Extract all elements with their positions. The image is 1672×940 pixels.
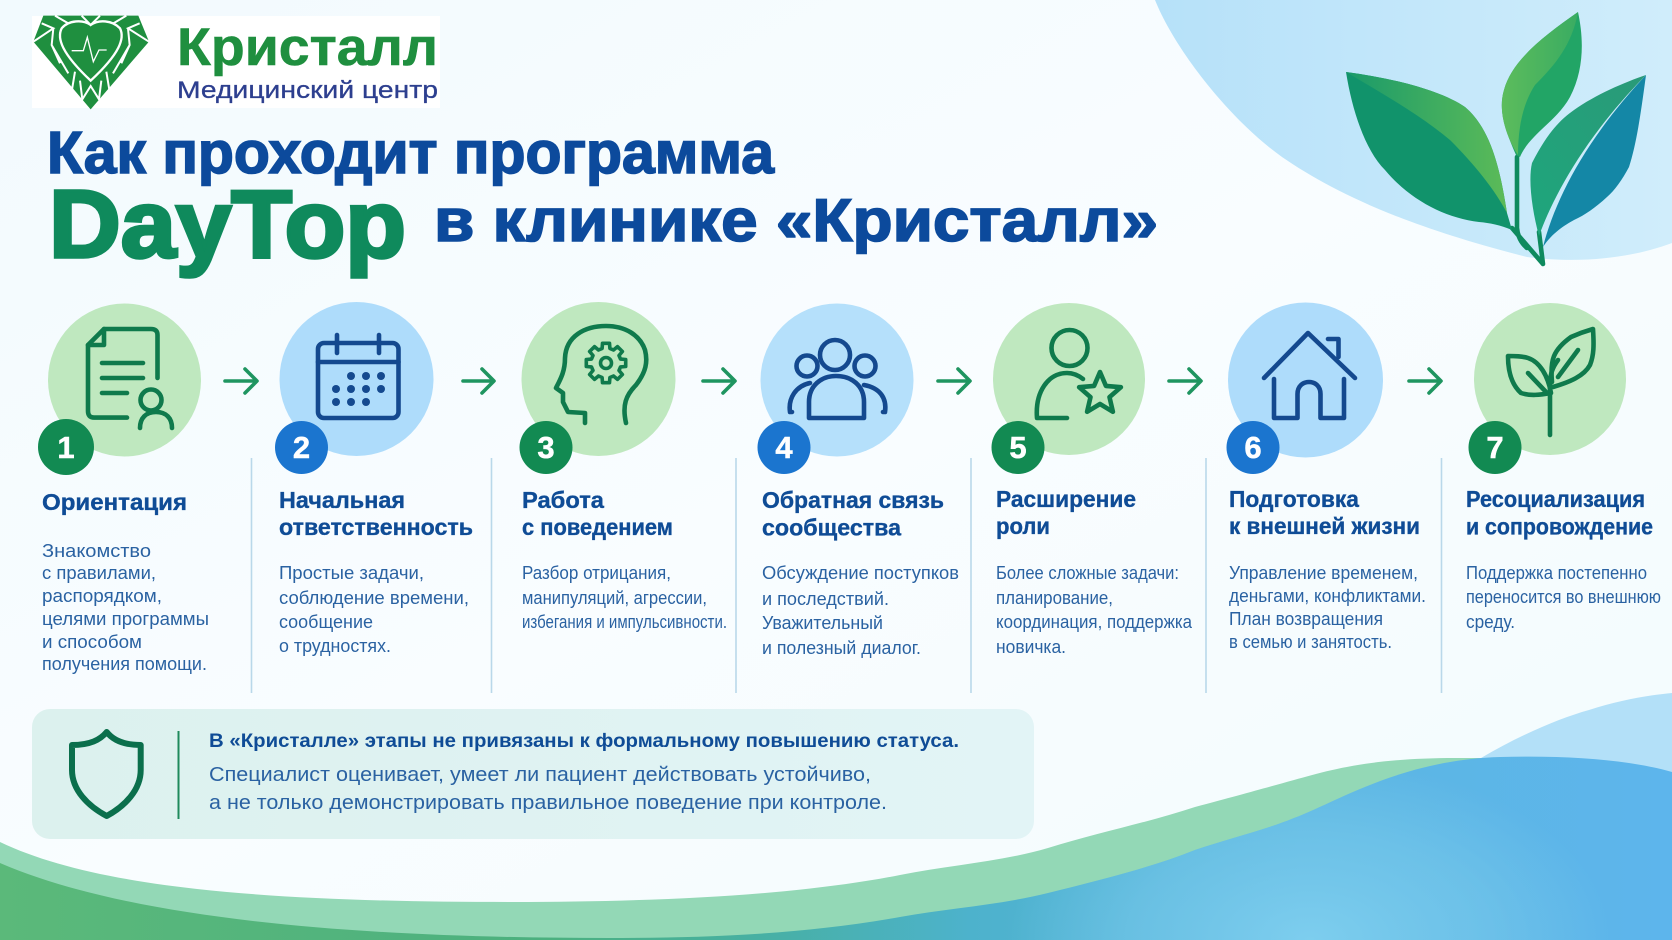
arrow 6 — [1409, 369, 1441, 393]
step 5 text: новичка. — [996, 637, 1066, 657]
badge 1: 1 — [57, 430, 75, 465]
step 2 text: соблюдение времени, — [279, 588, 469, 608]
badge 3: 3 — [537, 430, 555, 465]
callout text: Специалист оценивает, умеет ли пациент действовать устойчиво, — [209, 764, 871, 786]
callout text: В «Кристалле» этапы не привязаны к формальному повышению статуса. — [209, 731, 959, 752]
top leaf — [1502, 12, 1582, 157]
step 5 title — [996, 486, 1136, 539]
step 2 text: сообщение — [279, 612, 373, 632]
step 5 text: Более сложные задачи: — [996, 563, 1179, 583]
badge 3 — [520, 421, 572, 474]
step 4 text: Уважительный — [762, 613, 883, 633]
title line 1: Как проходит программа — [47, 120, 775, 186]
step 7 — [1466, 303, 1661, 632]
step 2 title — [279, 487, 473, 540]
step 6 title: к внешней жизни — [1229, 513, 1420, 539]
arrow 5 — [1169, 369, 1201, 393]
badge 7: 7 — [1486, 430, 1504, 465]
step 7 text: среду. — [1466, 612, 1515, 632]
arrow 1 — [225, 369, 257, 393]
icon: person with star — [1037, 330, 1121, 418]
step 3 title: с поведением — [522, 514, 673, 540]
step 5 text: координация, поддержка — [996, 612, 1193, 632]
title DayTop: DayTop — [49, 171, 406, 278]
step 1 text: с правилами, — [42, 563, 156, 583]
badge 5: 5 — [1009, 430, 1027, 465]
step 4 text — [762, 563, 959, 658]
step 1 text: целями программы — [42, 609, 209, 629]
step 6 text: План возвращения — [1229, 609, 1383, 629]
step 3 text: Разбор отрицания, — [522, 563, 671, 583]
step 3 text: избегания и импульсивности. — [522, 612, 727, 632]
step 6 title: Подготовка — [1229, 486, 1359, 512]
step 4 text: и полезный диалог. — [762, 638, 921, 658]
bottom waves — [0, 693, 1672, 940]
circle 4 — [760, 304, 914, 456]
plant illustration — [1346, 12, 1646, 264]
callout panel — [32, 709, 1034, 839]
circle 1 — [48, 304, 201, 456]
step dividers — [252, 458, 1442, 693]
step 6 text: Управление временем, — [1229, 563, 1418, 583]
step 6 text — [1229, 563, 1426, 652]
step 6 text: деньгами, конфликтами. — [1229, 586, 1426, 606]
circle 6 — [1228, 302, 1383, 458]
step 6 text: в семью и занятость. — [1229, 632, 1392, 652]
step 7 text: Поддержка постепенно — [1466, 563, 1647, 583]
step 2 text — [279, 563, 469, 656]
step 1 — [38, 304, 209, 674]
top-right blue shape — [1155, 0, 1672, 260]
arrow 4 — [938, 369, 970, 393]
icon: head with gear — [556, 326, 646, 423]
badge 2 — [275, 421, 328, 474]
callout text: а не только демонстрировать правильное поведение при контроле. — [209, 792, 887, 814]
step 2 title: ответственность — [279, 514, 473, 540]
logo subtitle: Медицинский центр — [177, 77, 438, 104]
step 7 text — [1466, 563, 1661, 632]
step 1 text — [42, 541, 209, 674]
step 7 title: и сопровождение — [1466, 514, 1653, 540]
circle 2 — [280, 302, 434, 456]
badge 7 — [1468, 421, 1522, 474]
icon: document with person — [88, 329, 172, 428]
left leaf — [1346, 72, 1512, 230]
step 4 text: Обсуждение поступков — [762, 563, 959, 583]
step 7 title: Ресоциализация — [1466, 486, 1645, 512]
step 3 — [520, 302, 727, 632]
step 5 — [992, 303, 1193, 657]
icon: group of people — [790, 340, 885, 418]
callout divider — [178, 731, 180, 819]
icon: calendar — [318, 335, 398, 418]
step 6 title — [1229, 486, 1420, 539]
badge 1 — [38, 419, 94, 475]
step 1 text: распорядком, — [42, 586, 162, 606]
arrow 3 — [703, 369, 735, 393]
step 3 text: манипуляций, агрессии, — [522, 588, 707, 608]
title line 2: в клинике «Кристалл» — [434, 187, 1158, 254]
arrow 2 — [463, 369, 494, 393]
step 1 title: Ориентация — [42, 489, 187, 515]
circle 5 — [993, 303, 1145, 455]
step 3 text — [522, 563, 727, 632]
step 4 — [758, 304, 959, 658]
circle 3 — [522, 302, 676, 456]
step 1 text: и способом — [42, 632, 142, 652]
step 2 — [275, 302, 473, 656]
step 6 — [1226, 302, 1426, 652]
step 5 text — [996, 563, 1193, 657]
title — [47, 120, 1158, 278]
right leaf — [1530, 75, 1646, 247]
step 4 title — [762, 487, 944, 540]
badge 5 — [992, 421, 1044, 474]
step 3 title — [522, 487, 673, 540]
badge 6 — [1226, 421, 1280, 474]
logo — [32, 16, 440, 109]
icon: sprout — [1508, 329, 1594, 435]
step 3 title: Работа — [522, 487, 604, 513]
step 1 text: Знакомство — [42, 541, 151, 561]
badge 4: 4 — [775, 430, 793, 465]
step 5 title: роли — [996, 513, 1050, 539]
step 4 title: Обратная связь — [762, 487, 944, 513]
logo name: Кристалл — [177, 18, 438, 77]
step 4 text: и последствий. — [762, 589, 889, 609]
step 2 text: Простые задачи, — [279, 563, 424, 583]
icon: shield — [72, 732, 141, 816]
step 2 title: Начальная — [279, 487, 405, 513]
step 7 title — [1466, 486, 1653, 540]
step 4 title: сообщества — [762, 514, 901, 540]
badge 6: 6 — [1244, 430, 1262, 465]
circle 7 — [1474, 303, 1626, 455]
badge 2: 2 — [293, 430, 310, 465]
step 2 text: о трудностях. — [279, 636, 391, 656]
step 5 text: планирование, — [996, 588, 1113, 608]
step 1 text: получения помощи. — [42, 654, 207, 674]
icon: diamond heart logo — [33, 16, 149, 109]
badge 4 — [758, 421, 810, 474]
callout text — [209, 731, 959, 814]
icon: house — [1264, 333, 1355, 418]
step 5 title: Расширение — [996, 486, 1136, 512]
